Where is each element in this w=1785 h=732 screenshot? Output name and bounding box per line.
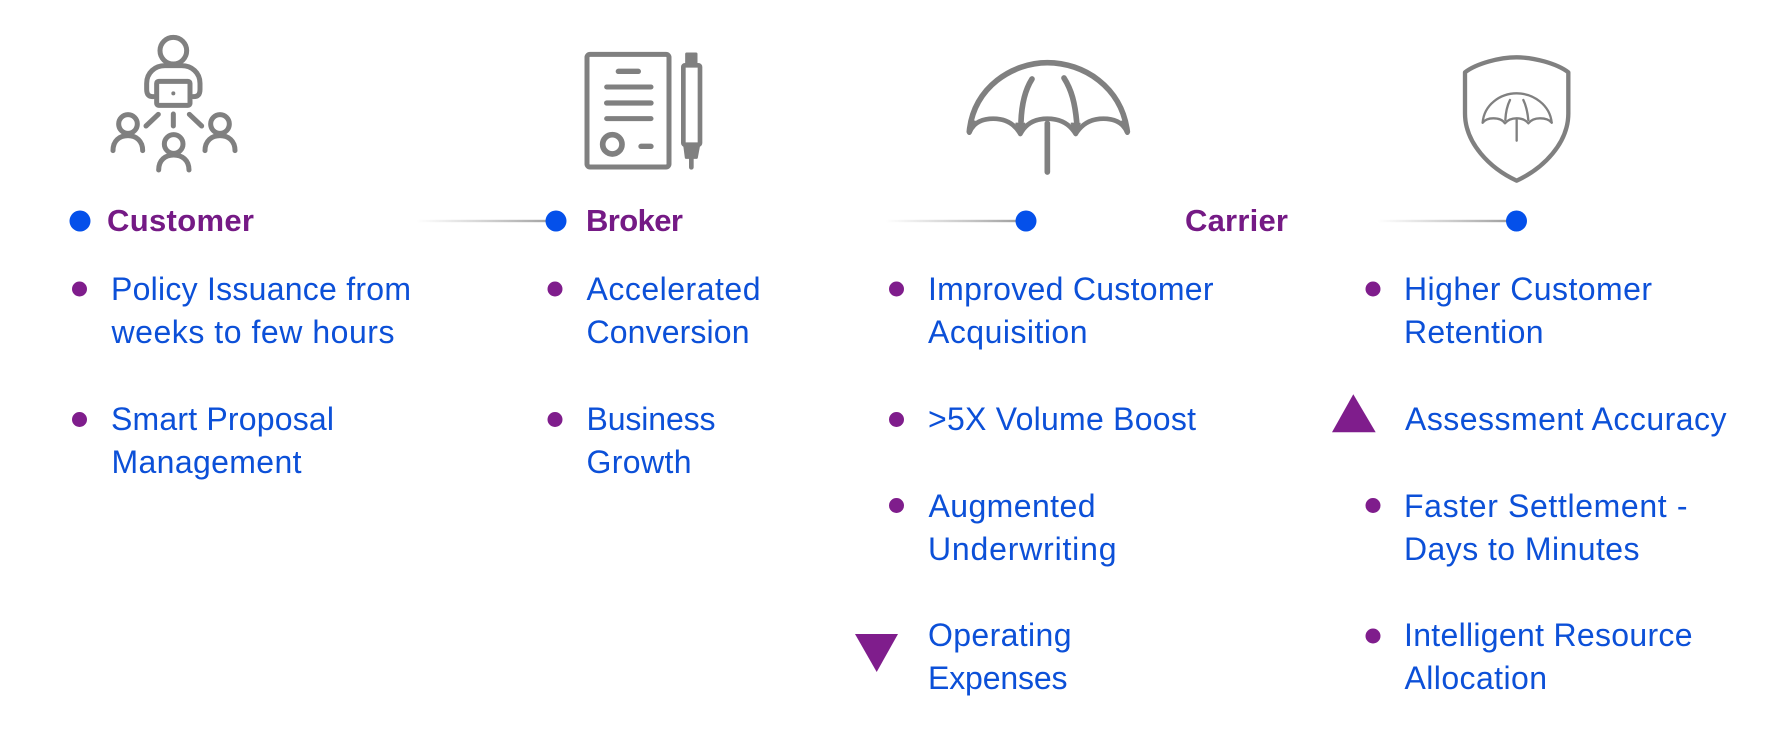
- panel: customer: [70, 37, 411, 480]
- icon: shield with umbrella: [1465, 57, 1568, 181]
- bullet: accelerated conversion: [548, 271, 760, 350]
- bullet: accelerated conversion: Conversion: [586, 314, 750, 350]
- panel: broker: [546, 54, 760, 480]
- bullet: accelerated conversion: Accelerated: [586, 271, 760, 307]
- bullet: faster settlement: Faster Settlement -: [1404, 488, 1688, 524]
- bullet: augmented underwriting: Underwriting: [928, 531, 1116, 567]
- icon: umbrella: [968, 63, 1129, 172]
- bullet: improved customer acquisition: Acquisition: [928, 314, 1088, 350]
- bullet: faster settlement: Days to Minutes: [1404, 531, 1640, 567]
- bullet: resource allocation: Allocation: [1404, 660, 1547, 696]
- bullet: operating expenses, down triangle: Operating: [928, 617, 1072, 653]
- bullet: operating expenses, down triangle: Expenses: [928, 660, 1068, 696]
- bullet: smart proposal: Smart Proposal: [111, 401, 334, 437]
- bullet: augmented underwriting: Augmented: [928, 488, 1096, 524]
- heading: Customer: Customer: [107, 203, 254, 238]
- bullet: assessment accuracy, up triangle: Assessment Accuracy: [1405, 401, 1726, 437]
- bullet: business growth: [548, 401, 716, 480]
- bullet: business growth: Growth: [586, 444, 692, 480]
- bullet: operating expenses, down triangle: [855, 617, 1072, 696]
- bullet: resource allocation: [1366, 617, 1692, 696]
- bullet: business growth: Business: [586, 401, 716, 437]
- bullet: volume boost: >5X Volume Boost: [928, 401, 1196, 437]
- bullet: policy issuance: [72, 271, 411, 350]
- bullet: policy issuance: Policy Issuance from: [111, 271, 411, 307]
- connector: customer to broker: [416, 220, 551, 222]
- icon: customer with laptop and people: [113, 37, 235, 170]
- panel: carrier: [1332, 57, 1726, 696]
- timeline dot: customer: [70, 210, 90, 232]
- bullet: resource allocation: Intelligent Resource: [1404, 617, 1692, 653]
- connector: broker to umbrella: [885, 220, 1017, 222]
- bullet: assessment accuracy, up triangle: [1332, 394, 1726, 437]
- bullet: customer retention: Higher Customer: [1404, 271, 1652, 307]
- heading: Broker: Broker: [586, 203, 683, 238]
- bullet: improved customer acquisition: [889, 271, 1214, 350]
- bullet: customer retention: Retention: [1404, 314, 1544, 350]
- bullet: smart proposal: [72, 401, 334, 480]
- bullet: smart proposal: Management: [112, 444, 302, 480]
- panel: umbrella column: [855, 63, 1214, 696]
- timeline dot: broker: [546, 210, 566, 232]
- bullet: improved customer acquisition: Improved Customer: [928, 271, 1214, 307]
- bullet: customer retention: [1366, 271, 1652, 350]
- heading: Carrier: Carrier: [1185, 203, 1288, 238]
- timeline dot: umbrella: [1016, 210, 1036, 232]
- bullet: faster settlement: [1366, 488, 1688, 567]
- bullet: augmented underwriting: [889, 488, 1116, 567]
- icon: document and pen: [587, 54, 700, 167]
- bullet: policy issuance: weeks to few hours: [110, 314, 394, 350]
- connector: carrier to shield: [1377, 220, 1507, 222]
- timeline dot: carrier: [1506, 210, 1527, 232]
